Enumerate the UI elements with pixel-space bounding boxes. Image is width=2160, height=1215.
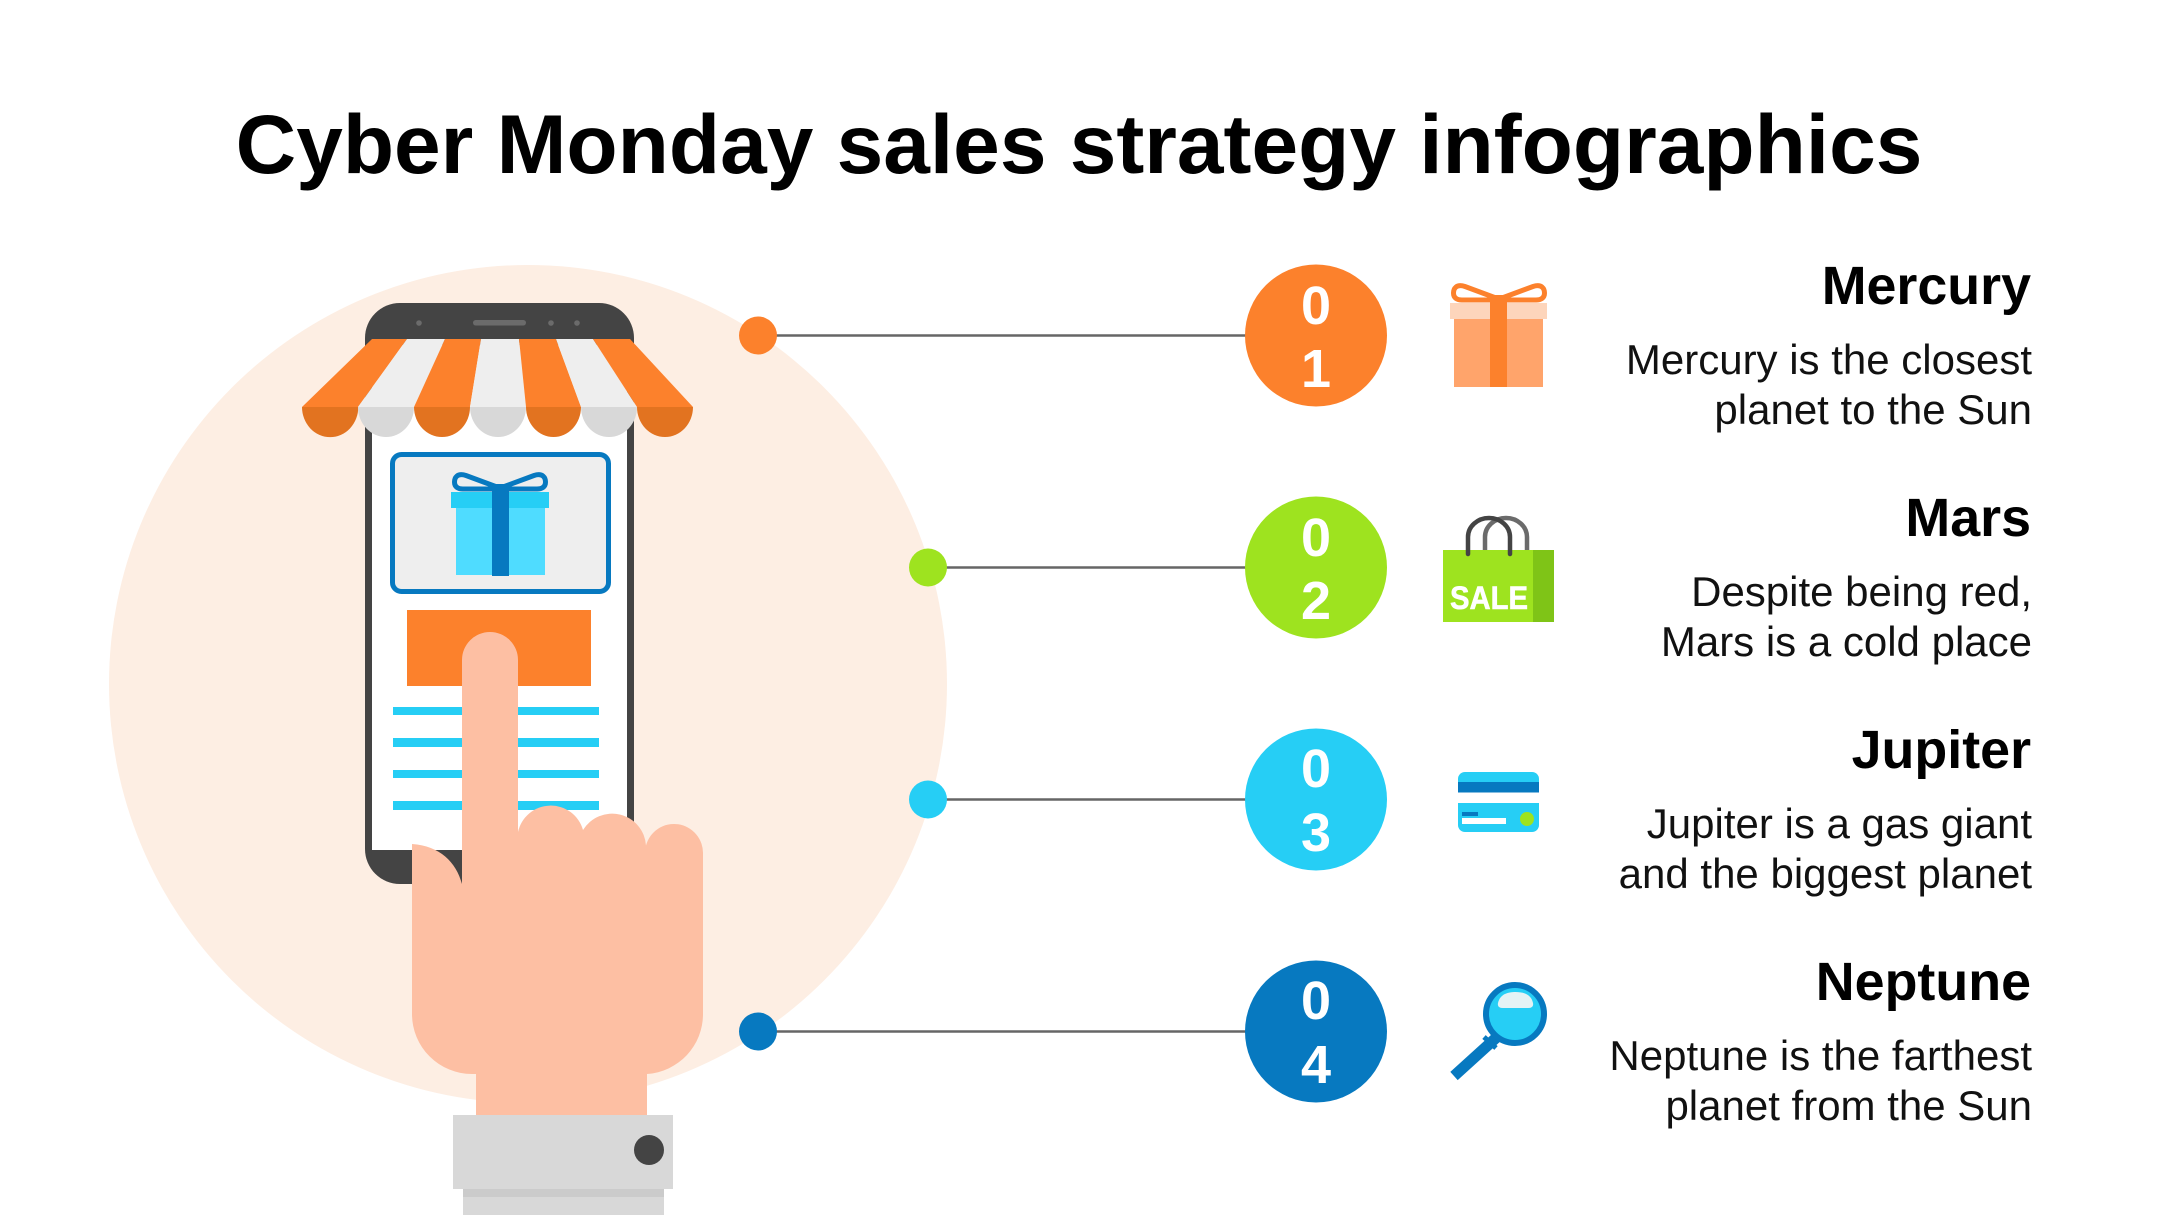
icon: sale bag xyxy=(1443,518,1554,622)
text block: Mercury: Mercury is the closest xyxy=(1626,336,2032,383)
text block: Mercury xyxy=(1626,256,2032,433)
number badge 03 xyxy=(1245,728,1387,870)
text block: Jupiter: and the biggest planet xyxy=(1619,850,2032,897)
illustration: phone with shop awning xyxy=(302,303,693,884)
text block: Neptune: Neptune xyxy=(1816,952,2031,1012)
orange button xyxy=(407,610,591,686)
number badge 01 xyxy=(1245,264,1387,406)
number badge 03: 3 xyxy=(1301,803,1331,863)
title: Cyber Monday sales strategy infographics xyxy=(236,97,1922,191)
text block: Mars: Despite being red, xyxy=(1691,568,2032,615)
text block: Mercury: planet to the Sun xyxy=(1714,386,2032,433)
awning xyxy=(302,339,693,437)
icon: gift on screen xyxy=(451,475,549,576)
text block: Mercury: Mercury xyxy=(1822,256,2031,316)
text block: Mars: Mars is a cold place xyxy=(1661,618,2032,665)
number badge 04: 4 xyxy=(1301,1035,1331,1095)
cuff xyxy=(453,1115,673,1189)
sleeve xyxy=(463,1189,664,1215)
icon: credit card xyxy=(1458,772,1539,832)
number badge 03: 0 xyxy=(1301,739,1331,799)
text block: Mars: Mars xyxy=(1905,488,2031,548)
number badge 01: 0 xyxy=(1301,276,1331,336)
connector lines xyxy=(770,336,1246,1032)
background circle xyxy=(109,265,947,1103)
text lines xyxy=(393,707,599,810)
number badge 04 xyxy=(1245,960,1387,1102)
number badge 04: 0 xyxy=(1301,971,1331,1031)
icon: sale bag: SALE xyxy=(1450,580,1528,616)
phone body xyxy=(365,303,634,884)
text block: Neptune: planet from the Sun xyxy=(1665,1082,2032,1129)
phone screen xyxy=(372,345,627,850)
text block: Mars xyxy=(1661,488,2032,665)
number badge 01: 1 xyxy=(1301,339,1331,399)
text block: Jupiter: Jupiter is a gas giant xyxy=(1647,800,2032,847)
phone camera and speaker xyxy=(416,320,580,326)
number badge 02: 0 xyxy=(1301,508,1331,568)
text block: Neptune: Neptune is the farthest xyxy=(1609,1032,2032,1079)
text block: Jupiter xyxy=(1619,720,2032,897)
text block: Neptune xyxy=(1609,952,2032,1129)
icon: gift xyxy=(1450,286,1547,387)
product card xyxy=(392,454,608,592)
hand xyxy=(412,632,703,1115)
icon: magnifying glass xyxy=(1454,985,1544,1076)
number badge 02: 2 xyxy=(1301,571,1331,631)
illustration: pointing hand xyxy=(412,632,703,1215)
number badge 02 xyxy=(1245,496,1387,638)
cuff button xyxy=(634,1135,664,1165)
text block: Jupiter: Jupiter xyxy=(1852,720,2031,780)
marker dots xyxy=(739,316,947,1050)
